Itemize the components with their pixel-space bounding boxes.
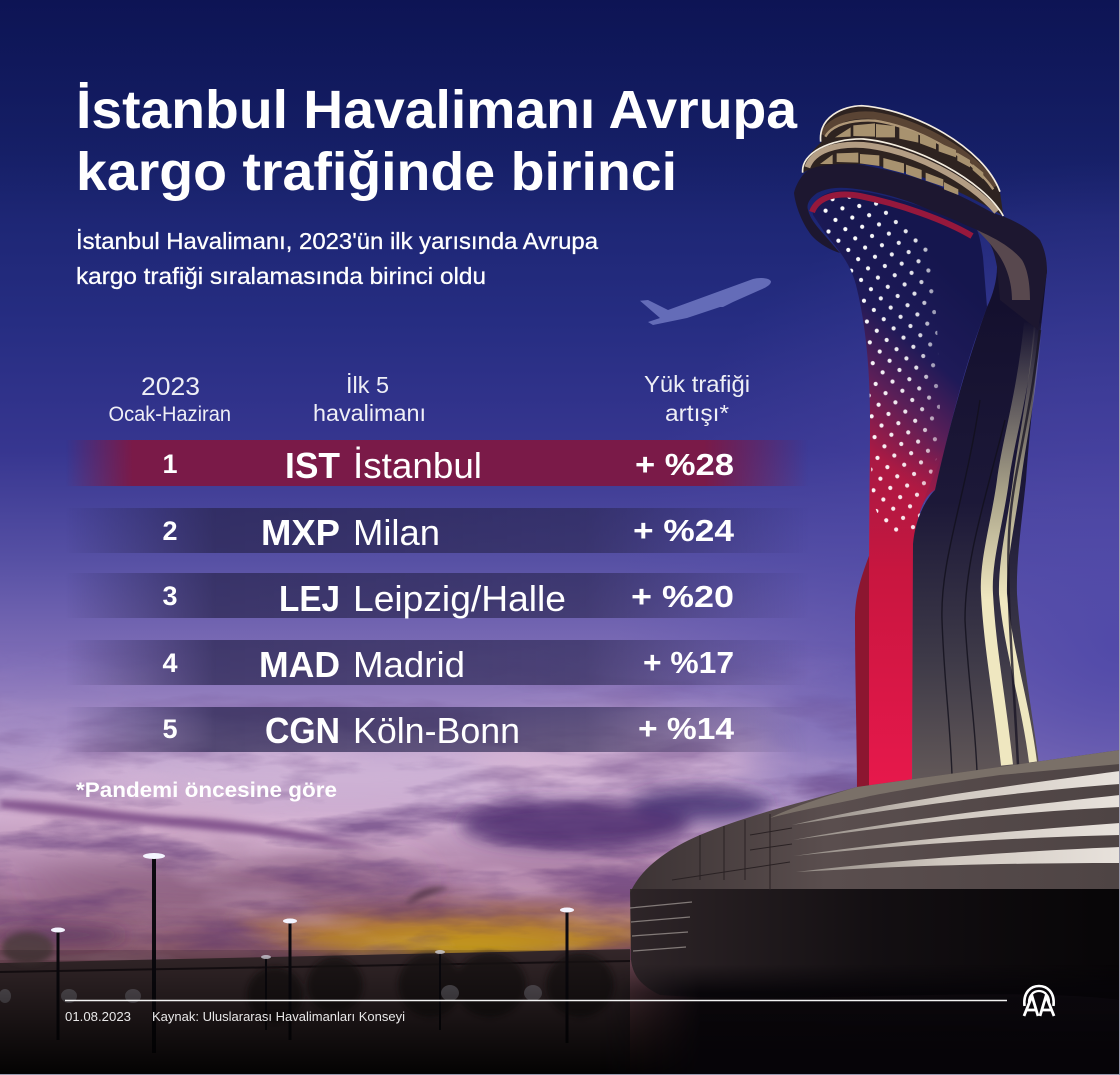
deck: lower roof band — [807, 145, 997, 212]
row 2: Milan: + %24 — [633, 513, 735, 548]
deck: upper roof band — [823, 115, 995, 187]
control tower — [794, 106, 1047, 795]
row 1: Istanbul: IST — [285, 445, 340, 486]
subtitle: İstanbul Havalimanı, 2023'ün ilk yarısında Avrupa — [76, 228, 598, 254]
row 4: Madrid: MAD — [259, 644, 340, 685]
row 5: Köln-Bonn: 5 — [162, 714, 178, 744]
footnote: *Pandemi öncesine göre — [76, 779, 337, 802]
table header: period column — [108, 373, 231, 426]
title — [76, 80, 798, 202]
table header: airports column: havalimanı — [313, 400, 426, 426]
row 4: Madrid: + %17 — [643, 645, 734, 680]
row 3: Leipzig/Halle: 3 — [162, 581, 178, 611]
table header: growth column — [644, 371, 750, 426]
row 5: Köln-Bonn: Köln-Bonn — [353, 710, 520, 751]
tower: perforated light dots — [823, 198, 940, 532]
row 4: Madrid: 4 — [162, 648, 178, 678]
row 2: Milan: MXP — [261, 512, 340, 553]
deck: lower windows — [820, 153, 958, 195]
subtitle — [76, 228, 598, 289]
title: kargo trafiğinde birinci — [76, 142, 677, 202]
row 1: Istanbul: İstanbul — [353, 445, 482, 486]
tower: bright red lower shaft — [869, 450, 945, 795]
tower: cream light stripes — [987, 323, 1038, 765]
row 2: Milan — [66, 508, 808, 553]
footer: date and source: Kaynak: Uluslararası Havalimanları Konseyi — [152, 1009, 405, 1024]
deck: solid backing — [803, 106, 1003, 216]
table header: growth column: Yük trafiği — [644, 371, 750, 397]
subtitle: kargo trafiği sıralamasında birinci oldu — [76, 263, 486, 289]
row 4: Madrid — [66, 640, 808, 685]
row 1: Istanbul: 1 — [162, 449, 178, 479]
terminal: small light slits — [630, 902, 692, 951]
tower: dark ribbed body — [912, 267, 1047, 790]
terminal: roof edge — [770, 750, 1120, 818]
terminal: upper panel band — [630, 750, 1120, 893]
row 1: Istanbul — [66, 440, 808, 486]
icon: airplane — [640, 278, 771, 325]
ground shadow — [628, 972, 1119, 1060]
row 2: Milan: 2 — [162, 516, 178, 546]
table header: airports column — [313, 372, 426, 426]
icon: agency logo — [1024, 986, 1054, 1016]
deck: white rims — [803, 139, 1003, 216]
terminal: white louvre stripes — [792, 771, 1120, 872]
row 5: Köln-Bonn: CGN — [265, 710, 340, 751]
table header: airports column: İlk 5 — [346, 372, 389, 398]
footer: date and source: 01.08.2023 — [65, 1009, 131, 1024]
footer rule — [65, 1000, 1007, 1002]
row 3: Leipzig/Halle: + %20 — [631, 579, 734, 614]
row 5: Köln-Bonn: + %14 — [638, 711, 735, 746]
background: bottom vignette — [0, 950, 1120, 1075]
table header: period column: 2023 — [141, 373, 200, 401]
row 4: Madrid: Madrid — [353, 644, 465, 685]
terminal building — [630, 750, 1120, 1000]
tower: dark collar — [794, 162, 1047, 330]
tower: red edge under the collar — [812, 195, 972, 236]
row 3: Leipzig/Halle — [66, 573, 808, 619]
table header: growth column: artışı* — [665, 400, 729, 426]
tower: shaft face — [813, 190, 987, 795]
row 5: Köln-Bonn — [66, 707, 808, 752]
deck: upper windows — [835, 123, 983, 179]
table header: period column: Ocak-Haziran — [108, 403, 231, 426]
terminal: lower dark band — [630, 880, 1120, 1000]
tower: tan glass reflection on collar — [977, 230, 1030, 300]
tower: observation decks — [803, 106, 1003, 216]
row 3: Leipzig/Halle: Leipzig/Halle — [353, 578, 566, 619]
terminal: panel seams — [672, 814, 792, 890]
row 1: Istanbul: + %28 — [635, 447, 734, 482]
tower: rib lines — [942, 330, 1040, 775]
row 3: Leipzig/Halle: LEJ — [279, 578, 340, 619]
background: distant building, trees and lamp posts — [0, 853, 630, 1075]
title: İstanbul Havalimanı Avrupa — [76, 80, 798, 140]
row 2: Milan: Milan — [353, 512, 440, 553]
tower: side red fin — [855, 556, 872, 795]
